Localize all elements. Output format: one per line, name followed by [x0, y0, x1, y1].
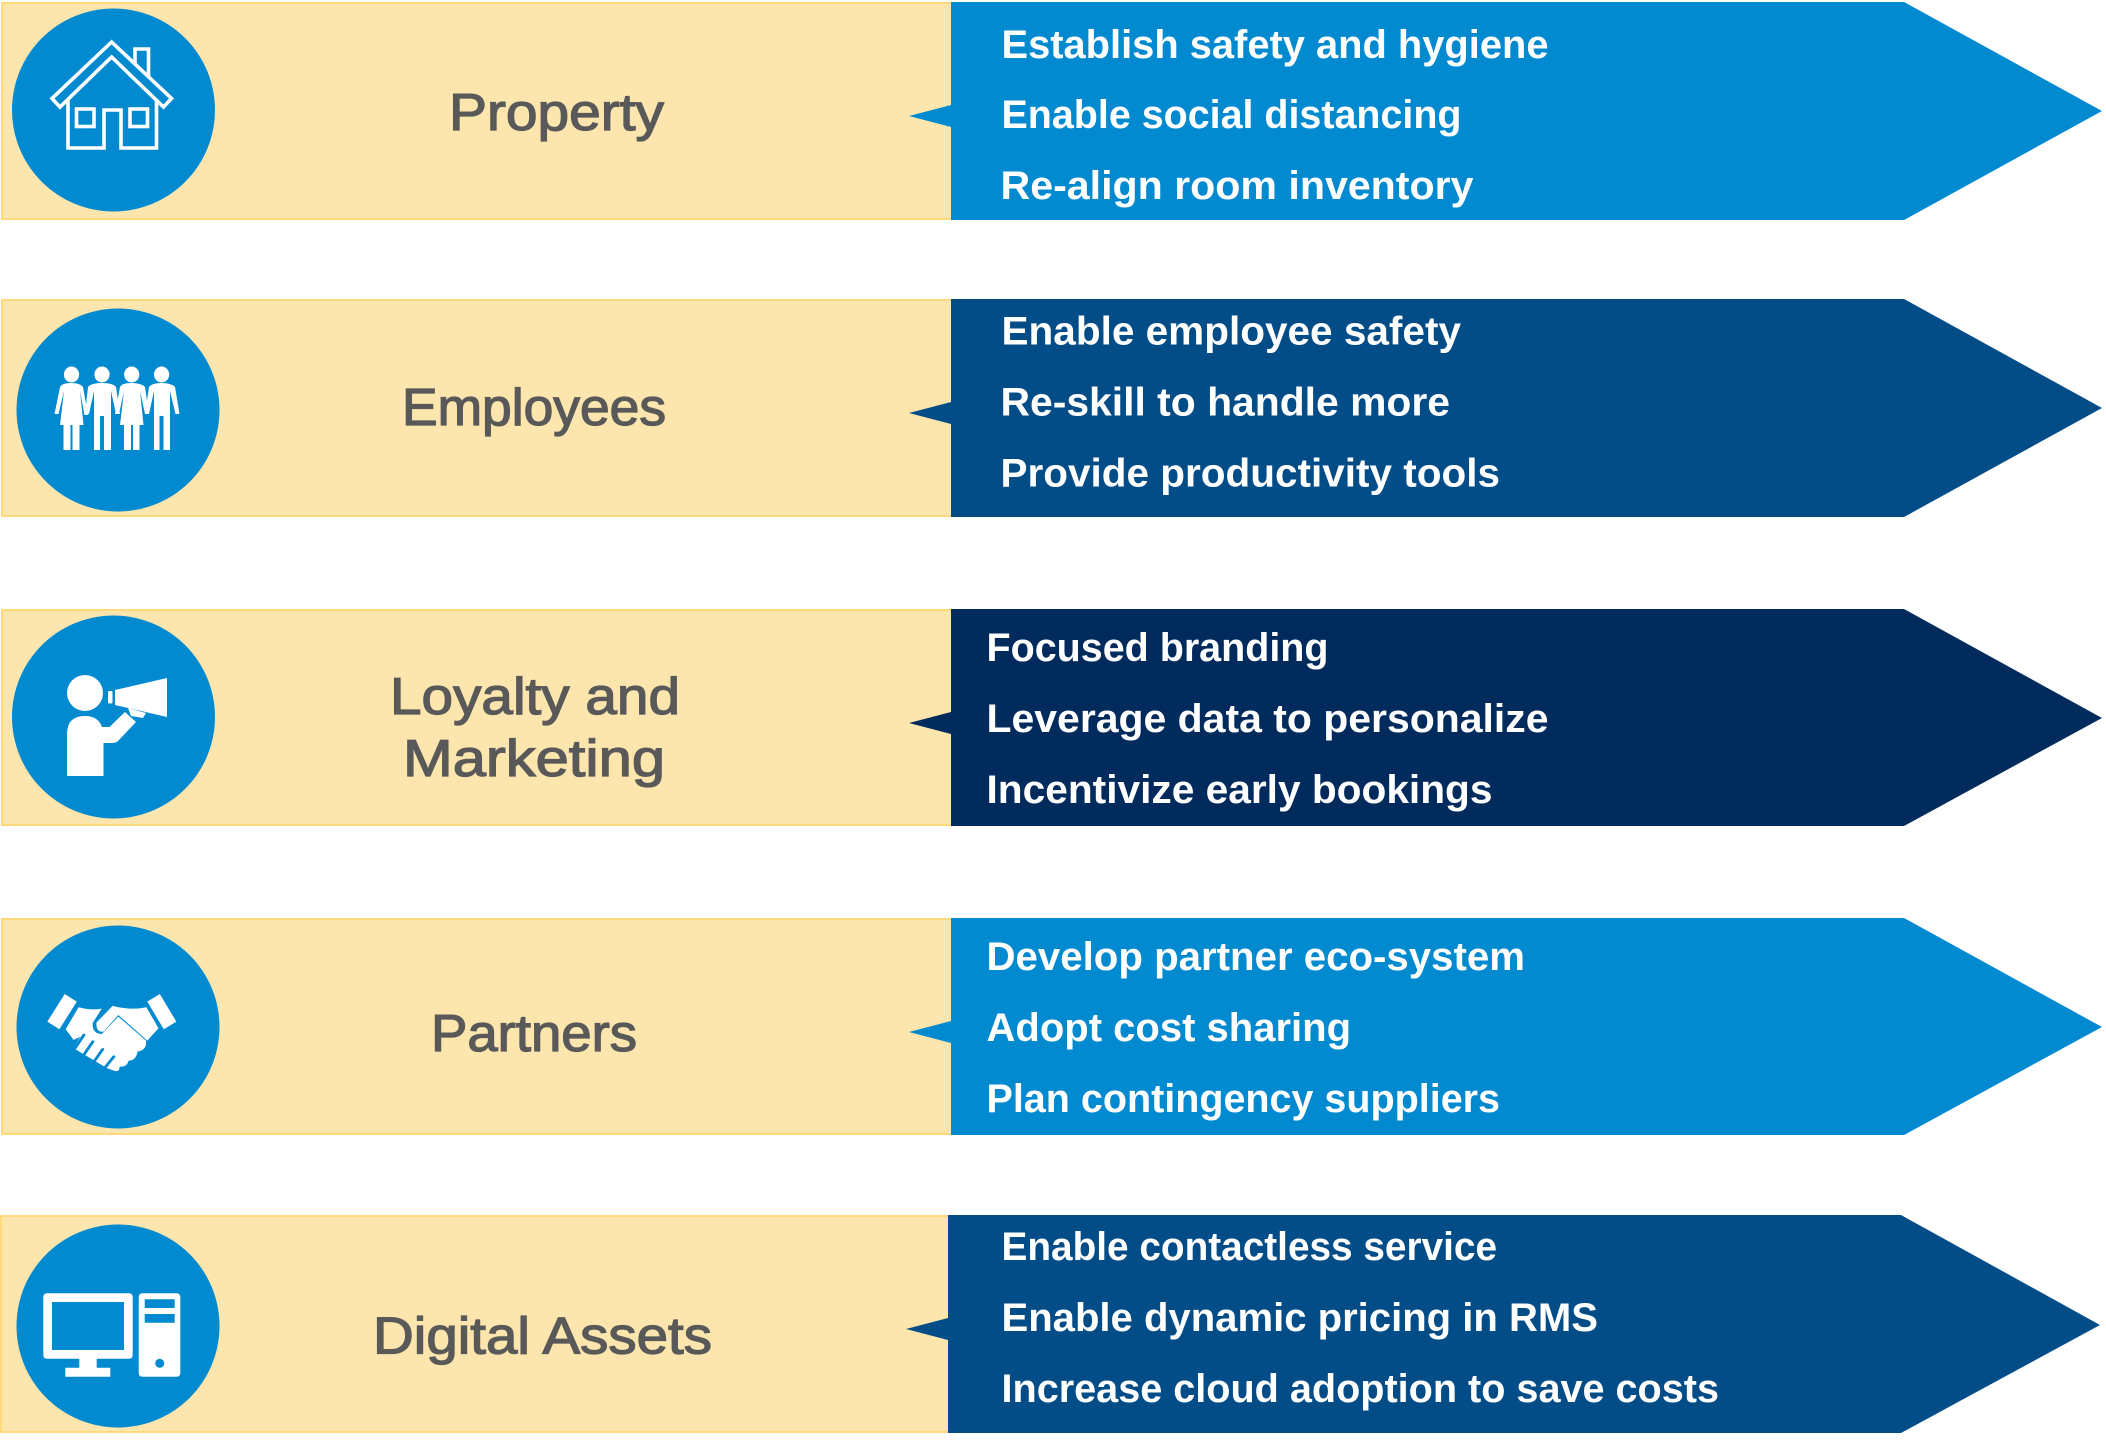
heading: Loyalty and Marketing: Loyalty and [390, 668, 680, 726]
text: Loyalty and Marketing actions [986, 626, 1548, 812]
icon: circle with desktop computer [16, 1224, 220, 1428]
arrow: Property [909, 2, 2102, 220]
text: Partners actions: Develop partner eco-system [986, 935, 1525, 979]
icon: circle with handshake [16, 926, 220, 1128]
text: Property actions: Enable social distancing [1002, 93, 1462, 137]
panel: Property label [2, 3, 962, 219]
heading: Property: Property [449, 84, 664, 142]
text: Loyalty and Marketing actions: Incentivize early bookings [986, 768, 1492, 812]
arrow: Employees [909, 299, 2102, 517]
heading: Partners: Partners [431, 1005, 637, 1063]
panel: Loyalty and Marketing label [2, 610, 962, 825]
row: Employees [2, 299, 2102, 517]
text: Digital Assets actions: Enable contactless service [1002, 1225, 1497, 1269]
panel: Employees label [2, 300, 962, 516]
row: Digital Assets [1, 1215, 2100, 1433]
row: Loyalty and Marketing [2, 609, 2102, 826]
text: Digital Assets actions [1002, 1225, 1719, 1411]
text: Partners actions: Adopt cost sharing [986, 1006, 1351, 1050]
text: Digital Assets actions: Enable dynamic pricing in RMS [1002, 1296, 1598, 1340]
text: Employees actions: Provide productivity tools [1000, 452, 1500, 496]
text: Employees actions: Enable employee safety [1002, 310, 1462, 354]
row: Partners [2, 918, 2102, 1135]
arrow: Loyalty and Marketing [909, 609, 2102, 826]
text: Property actions [1000, 23, 1548, 208]
panel: Partners label [2, 919, 962, 1134]
heading: Loyalty and Marketing [390, 668, 680, 788]
text: Property actions: Establish safety and hygiene [1002, 23, 1548, 67]
heading: Loyalty and Marketing: Marketing [403, 730, 665, 788]
heading: Digital Assets: Digital Assets [373, 1308, 712, 1366]
text: Employees actions [1000, 310, 1500, 496]
text: Employees actions: Re-skill to handle more [1000, 380, 1450, 424]
row: Property [2, 2, 2102, 220]
arrow: Digital Assets [906, 1215, 2100, 1433]
icon: circle with four people [16, 308, 220, 512]
icon: circle with house [12, 8, 215, 212]
heading: Employees: Employees [402, 379, 666, 437]
text: Loyalty and Marketing actions: Leverage data to personalize [986, 697, 1548, 741]
arrow: Partners [909, 918, 2102, 1135]
panel: Digital Assets label [1, 1216, 961, 1432]
text: Partners actions [986, 935, 1525, 1121]
text: Property actions: Re-align room inventory [1000, 164, 1474, 208]
text: Digital Assets actions: Increase cloud adoption to save costs [1002, 1367, 1719, 1411]
text: Partners actions: Plan contingency suppliers [986, 1077, 1500, 1121]
icon: circle with person and megaphone [12, 616, 215, 818]
text: Loyalty and Marketing actions: Focused branding [986, 626, 1328, 670]
